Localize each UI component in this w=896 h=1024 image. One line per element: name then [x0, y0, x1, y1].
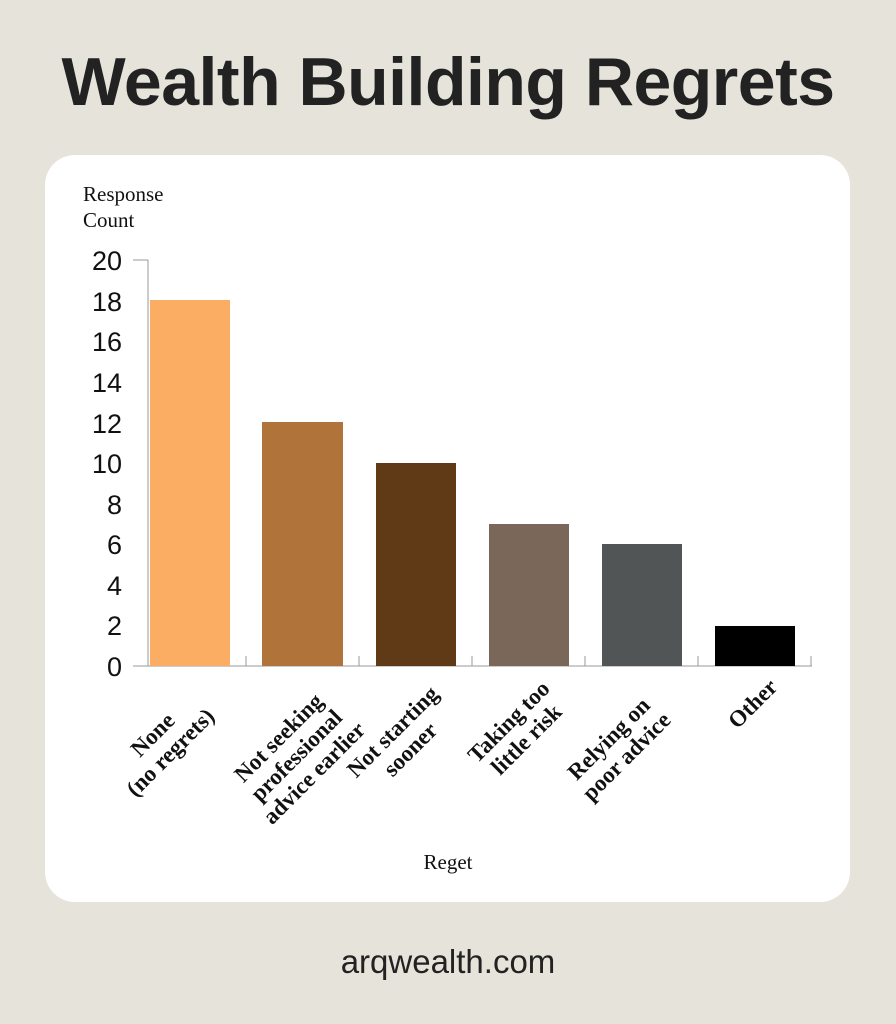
category labels: advice earlier [258, 717, 370, 829]
category labels: Other [723, 674, 782, 733]
category labels: Not seeking [229, 688, 328, 787]
y axis title: Count [83, 208, 135, 232]
category labels: (no regrets) [121, 703, 219, 801]
bars [150, 300, 795, 666]
y axis: 12 [92, 409, 122, 439]
category labels: little risk [486, 699, 567, 780]
title: Wealth Building Regrets [61, 44, 835, 120]
category labels: Relying on [563, 692, 655, 785]
y axis: 0 [107, 652, 122, 682]
category labels: poor advice [577, 707, 675, 805]
y axis: 14 [92, 368, 122, 398]
category labels: professional [246, 705, 347, 806]
y axis: 4 [107, 571, 122, 601]
footer url: arqwealth.com [341, 943, 555, 980]
y axis title [83, 182, 164, 232]
y axis [92, 246, 812, 682]
y axis: 16 [92, 327, 122, 357]
y axis: 18 [92, 287, 122, 317]
category labels: sooner [378, 717, 442, 781]
y axis: 10 [92, 449, 122, 479]
category labels: Not starting [342, 681, 444, 782]
category labels: None [126, 708, 180, 762]
y axis: 2 [107, 611, 122, 641]
panel: chart card [45, 155, 850, 902]
y axis: 8 [107, 490, 122, 520]
y axis title: Response [83, 182, 164, 206]
x axis title: Reget [424, 850, 473, 874]
category labels [104, 674, 782, 829]
y axis: 20 [92, 246, 122, 276]
y axis: 6 [107, 530, 122, 560]
category labels: Taking too [463, 676, 555, 768]
